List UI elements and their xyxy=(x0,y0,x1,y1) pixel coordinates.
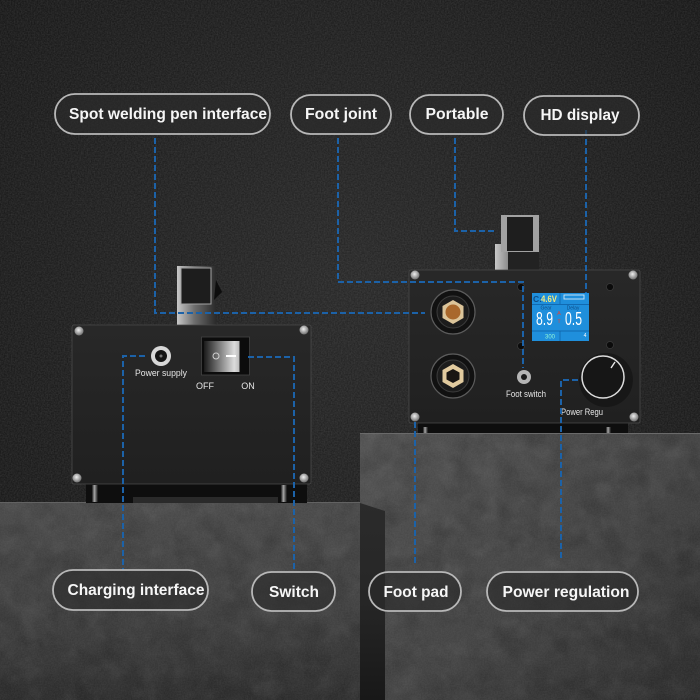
LCD display: A xyxy=(557,311,561,317)
callout: spot welding pen interface: Spot welding pen interface xyxy=(69,106,267,123)
device: rear unit xyxy=(72,266,311,503)
LCD display: Delay xyxy=(567,306,580,312)
callout: charging interface xyxy=(53,570,208,610)
callout: charging interface: Charging interface xyxy=(68,582,205,599)
icon: power dial xyxy=(579,353,633,407)
power supply label: Power supply xyxy=(135,368,187,378)
LCD display: 8.9 xyxy=(536,309,553,329)
icon: upper weld socket xyxy=(431,290,475,334)
callout: switch xyxy=(252,572,335,611)
on label: ON xyxy=(241,381,255,391)
device: front unit xyxy=(409,215,640,433)
foot switch label: Foot switch xyxy=(506,389,546,399)
off label: OFF xyxy=(196,381,214,391)
callout: hd display xyxy=(524,96,639,135)
front unit screws xyxy=(410,270,638,422)
rear unit screws xyxy=(72,326,308,482)
callout: power regulation: Power regulation xyxy=(502,584,630,601)
LCD display xyxy=(532,293,589,341)
callout: foot pad: Foot pad xyxy=(384,584,448,601)
icon: rear unit handle xyxy=(177,266,222,326)
callout: power regulation xyxy=(487,572,638,611)
LCD display: 0.5 xyxy=(565,309,582,329)
LCD display: 300 xyxy=(545,334,556,340)
callout: portable xyxy=(410,95,503,134)
icon: front unit handle xyxy=(495,215,539,270)
LCD display: 4.6V xyxy=(541,294,557,304)
LCD display: C: xyxy=(533,294,542,304)
stone block: left xyxy=(0,502,385,700)
small black screws xyxy=(518,284,614,350)
LCD display: Gear xyxy=(540,306,552,312)
LCD display: 4 xyxy=(584,333,587,339)
front unit feet xyxy=(418,423,628,433)
callout: foot joint: Foot joint xyxy=(305,106,378,123)
LCD display: T xyxy=(557,319,561,325)
callout: switch: Switch xyxy=(269,584,319,601)
leader lines xyxy=(123,130,586,572)
icon: rocker switch xyxy=(202,337,250,375)
front unit panel xyxy=(409,270,640,423)
icon: foot switch jack xyxy=(517,370,531,384)
icon: lower weld socket xyxy=(431,354,475,398)
callout: foot joint xyxy=(291,95,391,134)
power regulation label: Power Regu xyxy=(561,407,603,417)
rear unit panel xyxy=(72,325,311,484)
callout: spot welding pen interface xyxy=(55,94,270,134)
callout: foot pad xyxy=(369,572,461,611)
rear unit feet xyxy=(86,484,307,503)
callout: portable: Portable xyxy=(426,106,489,123)
stone block: right xyxy=(360,433,700,700)
callout: hd display: HD display xyxy=(540,107,620,124)
icon: power supply jack xyxy=(151,346,171,366)
